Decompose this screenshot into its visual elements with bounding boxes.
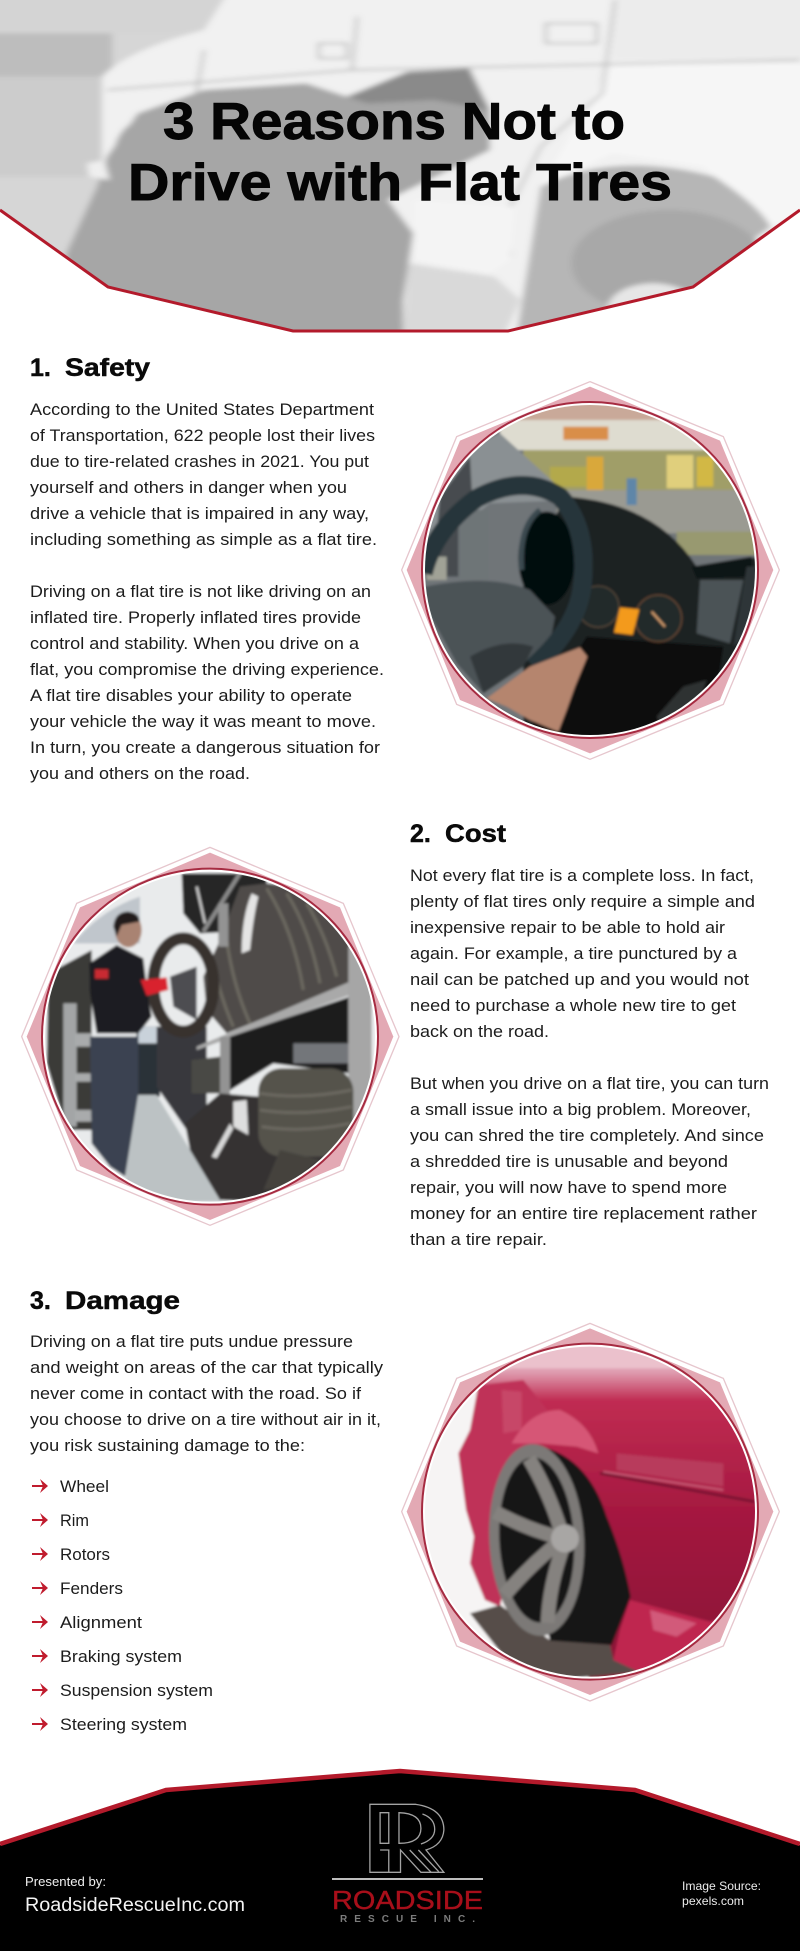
section 3 paragraph xyxy=(30,1332,384,1455)
section 1 paragraph 2: flat, you compromise the driving experience. xyxy=(30,660,384,679)
section 2 paragraph 1: inexpensive repair to be able to hold air xyxy=(410,918,725,937)
list item: Rim: Rim xyxy=(60,1511,89,1530)
section 3 paragraph: you risk sustaining damage to the: xyxy=(30,1436,305,1455)
photo frame: red car with flat tire xyxy=(402,1323,779,1701)
logo rule xyxy=(332,1878,483,1880)
section 1 paragraph 2: you and others on the road. xyxy=(30,764,250,783)
section 1 paragraph 2: control and stability. When you drive on a xyxy=(30,634,360,653)
section 1 paragraph 1: including something as simple as a flat tire. xyxy=(30,530,377,549)
presented by text: RoadsideRescueInc.com xyxy=(25,1895,245,1916)
section 2 paragraph 1: nail can be patched up and you would not xyxy=(410,970,749,989)
section 3 heading: Damage: 3. xyxy=(30,1287,51,1315)
list item: Steering system: Steering system xyxy=(60,1715,187,1734)
section 3 heading: Damage: Damage xyxy=(65,1287,180,1315)
image source credit xyxy=(682,1879,761,1908)
presented by text xyxy=(25,1874,245,1916)
section 1 paragraph 1: yourself and others in danger when you xyxy=(30,478,347,497)
section 2 paragraph 2: than a tire repair. xyxy=(410,1230,547,1249)
list item: Wheel: Wheel xyxy=(60,1477,109,1496)
image source credit: pexels.com xyxy=(682,1894,744,1908)
logo tagline: RESCUE INC. xyxy=(340,1914,475,1925)
section 2 paragraph 1: need to purchase a whole new tire to get xyxy=(410,996,736,1015)
photo frame: steering wheel xyxy=(402,382,779,759)
title xyxy=(128,93,672,212)
list item: Rim xyxy=(32,1511,89,1530)
photo frame: tire shop worker xyxy=(22,847,399,1225)
section 1 paragraph 1: due to tire-related crashes in 2021. You put xyxy=(30,452,369,471)
title: Drive with Flat Tires xyxy=(128,154,672,212)
list item: Rotors: Rotors xyxy=(60,1545,110,1564)
section 1 paragraph 2: your vehicle the way it was meant to move. xyxy=(30,712,376,731)
section 2 heading: Cost xyxy=(410,820,507,848)
section 2 paragraph 2: a small issue into a big problem. Moreover, xyxy=(410,1100,751,1119)
section 2 paragraph 2: repair, you will now have to spend more xyxy=(410,1178,727,1197)
section 2 paragraph 2: a shredded tire is unusable and beyond xyxy=(410,1152,728,1171)
section 1 paragraph 2 xyxy=(30,582,384,783)
list item: Rotors xyxy=(32,1545,110,1564)
section 2 paragraph 1: again. For example, a tire punctured by a xyxy=(410,944,738,963)
footer band xyxy=(0,1771,800,1951)
section 2 heading: Cost: 2. xyxy=(410,820,431,848)
section 2 paragraph 2: you can shred the tire completely. And since xyxy=(410,1126,764,1145)
section 2 paragraph 1: Not every flat tire is a complete loss. In fact, xyxy=(410,866,754,885)
section 3 heading: Damage xyxy=(30,1287,180,1315)
section 2 paragraph 1 xyxy=(410,866,755,1041)
section 2 paragraph 2: money for an entire tire replacement rather xyxy=(410,1204,757,1223)
section 1 paragraph 1 xyxy=(30,400,377,549)
section 3 paragraph: Driving on a flat tire puts undue pressure xyxy=(30,1332,353,1351)
section 1 paragraph 1: of Transportation, 622 people lost their lives xyxy=(30,426,375,445)
logo mark: double R xyxy=(370,1804,444,1872)
list item: Fenders: Fenders xyxy=(60,1579,123,1598)
logo: Roadside Rescue Inc. xyxy=(332,1804,483,1925)
logo wordmark: ROADSIDE xyxy=(332,1885,483,1915)
section 1 paragraph 1: According to the United States Department xyxy=(30,400,374,419)
section 3 paragraph: you choose to drive on a tire without air in it, xyxy=(30,1410,381,1429)
section 1 heading: Safety: Safety xyxy=(65,354,150,382)
list item: Suspension system: Suspension system xyxy=(60,1681,213,1700)
section 1 paragraph 2: Driving on a flat tire is not like driving on an xyxy=(30,582,371,601)
header: grayscale car photo with polygon edge xyxy=(0,0,800,343)
list item: Fenders xyxy=(32,1579,123,1598)
list of damaged parts xyxy=(32,1477,213,1734)
section 2 heading: Cost: Cost xyxy=(445,820,507,848)
section 1 paragraph 2: In turn, you create a dangerous situation for xyxy=(30,738,380,757)
list item: Alignment: Alignment xyxy=(60,1613,142,1632)
section 1 paragraph 1: drive a vehicle that is impaired in any way, xyxy=(30,504,369,523)
section 3 paragraph: never come in contact with the road. So if xyxy=(30,1384,361,1403)
section 2 paragraph 1: back on the road. xyxy=(410,1022,549,1041)
section 1 heading: Safety: 1. xyxy=(30,354,51,382)
section 2 paragraph 2: But when you drive on a flat tire, you can turn xyxy=(410,1074,769,1093)
presented by text: Presented by: xyxy=(25,1874,106,1889)
section 1 heading: Safety xyxy=(30,354,150,382)
title: 3 Reasons Not to xyxy=(163,93,625,151)
section 2 paragraph 1: plenty of flat tires only require a simple and xyxy=(410,892,755,911)
list item: Alignment xyxy=(32,1613,142,1632)
image source credit: Image Source: xyxy=(682,1879,761,1893)
list item: Wheel xyxy=(32,1477,109,1496)
section 1 paragraph 2: inflated tire. Properly inflated tires provide xyxy=(30,608,361,627)
list item: Braking system: Braking system xyxy=(60,1647,182,1666)
section 2 paragraph 2 xyxy=(410,1074,769,1249)
section 1 paragraph 2: A flat tire disables your ability to operate xyxy=(30,686,352,705)
section 3 paragraph: and weight on areas of the car that typically xyxy=(30,1358,384,1377)
